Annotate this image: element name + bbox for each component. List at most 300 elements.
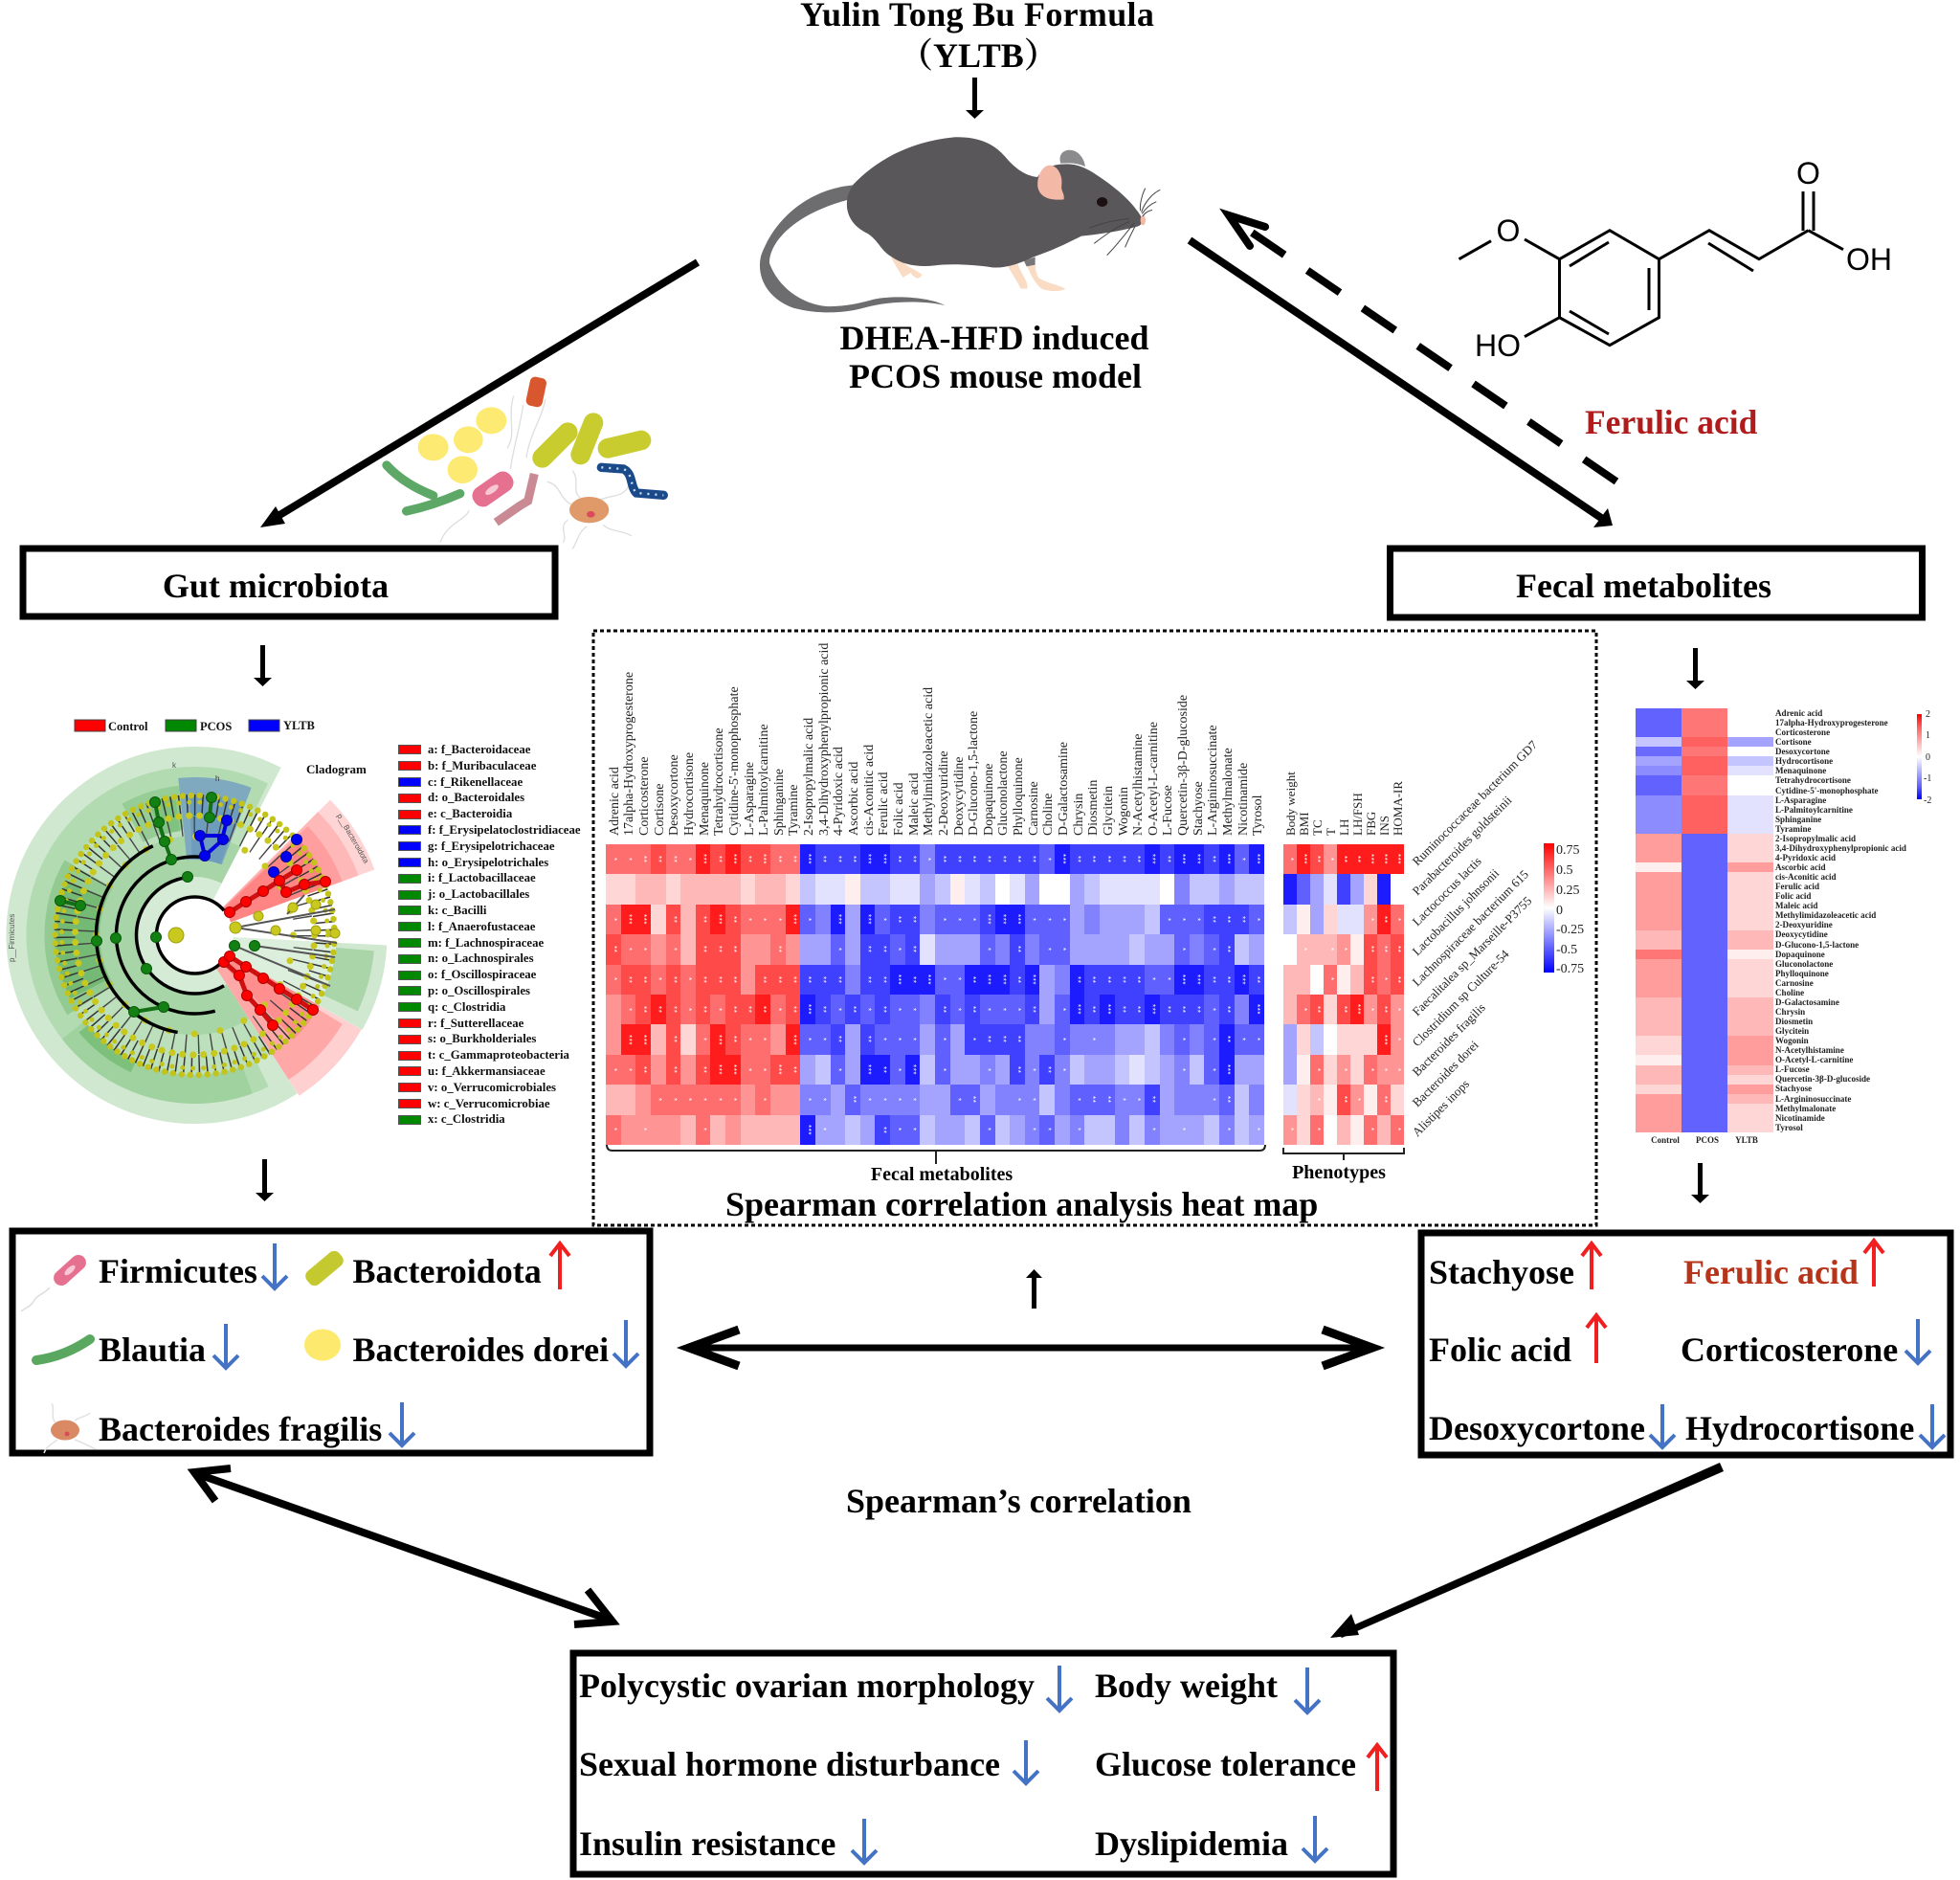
group heat map row labels: Sphinganine	[1775, 815, 1821, 824]
chart: metabolite by bacteria correlation heat map: *	[610, 858, 618, 862]
arrow: metabolites to outcomes	[1330, 1463, 1724, 1638]
chart: metabolite by bacteria correlation heat map: **	[1103, 1096, 1112, 1104]
ferulic acid label: Ferulic acid	[1585, 403, 1758, 441]
metabolite column labels: Desoxycortone	[667, 754, 681, 836]
chart: phenotype by bacteria correlation heat map: *	[1380, 977, 1389, 981]
group heat map row labels: Tyrosol	[1775, 1123, 1803, 1132]
metabolite column labels: Phylloquinone	[1012, 757, 1026, 836]
chart: metabolite by bacteria correlation heat map: *	[1208, 1008, 1216, 1012]
chart: metabolite by bacteria correlation heat map: *	[610, 1068, 618, 1071]
cladogram taxa legend: x: c_Clostridia	[428, 1112, 505, 1126]
chart: phenotype by bacteria correlation heat map: *	[1286, 858, 1295, 862]
chart: metabolite by bacteria correlation heat map: ***	[1103, 1004, 1112, 1015]
chart: metabolite by bacteria correlation heat map: *	[1253, 1038, 1261, 1041]
chart: metabolite by bacteria correlation heat map: **	[729, 946, 738, 953]
chart: metabolite by bacteria correlation heat map: *	[1043, 1128, 1052, 1131]
chart: phenotype by bacteria correlation heat map: *	[1313, 1098, 1322, 1102]
chart: metabolite by bacteria correlation heat map: *	[984, 1068, 992, 1071]
chart: metabolite by bacteria correlation heat map: **	[1103, 976, 1112, 983]
chart: metabolite by bacteria correlation heat map: **	[849, 1096, 858, 1104]
chart: metabolite by bacteria correlation heat map: *	[624, 1008, 633, 1012]
chart: phenotype by bacteria correlation heat map: **	[1340, 1096, 1348, 1104]
heat map color key for group heat map: 2	[1926, 709, 1930, 720]
chart: metabolite by bacteria correlation heat map: **	[669, 1006, 678, 1013]
chart: metabolite by bacteria correlation heat map: *	[1088, 1038, 1097, 1041]
chart: metabolite by bacteria correlation heat map: *	[714, 1098, 723, 1102]
panel: Gut microbiota heading	[23, 548, 555, 616]
bacteria row labels: Lactococcus lactis	[1410, 854, 1484, 929]
chart: metabolite by bacteria correlation heat map: *	[1133, 1098, 1142, 1102]
cladogram taxa legend: f: f_Erysipelatoclostridiaceae	[428, 823, 581, 837]
cladogram taxa legend: j: o_Lactobacillales	[428, 887, 529, 901]
chart: metabolite by bacteria correlation heat map: ***	[1029, 974, 1037, 985]
cladogram taxa legend: k: c_Bacilli	[428, 904, 486, 917]
chart: phenotype by bacteria correlation heat map: **	[1380, 946, 1389, 953]
chart: phenotype by bacteria correlation heat map: *	[1326, 977, 1335, 981]
chart: metabolite by bacteria correlation heat map: **	[1208, 916, 1216, 923]
chart: metabolite by bacteria correlation heat map: **	[819, 856, 828, 862]
chart: metabolite by bacteria correlation heat map: **	[1074, 976, 1082, 983]
chart: metabolite by bacteria correlation heat map: *	[894, 948, 902, 951]
chart: metabolite by bacteria correlation heat map: **	[1163, 1006, 1171, 1013]
chart: metabolite by bacteria correlation heat map: *	[953, 1008, 962, 1012]
cladogram branches and nodes: p__Bacteroidota	[335, 812, 370, 865]
chart: metabolite by bacteria correlation heat map: *	[1163, 977, 1171, 981]
chart: metabolite by bacteria correlation heat map: **	[1223, 1006, 1232, 1013]
chart: metabolite by bacteria correlation heat map: ***	[729, 854, 738, 864]
chart: metabolite by bacteria correlation heat map: **	[700, 1006, 708, 1013]
chart: phenotype by bacteria correlation heat map: ***	[1393, 854, 1402, 864]
cladogram taxa legend: h: o_Erysipelotrichales	[428, 856, 548, 869]
chart: metabolite by bacteria correlation heat map: *	[700, 1128, 708, 1131]
chart: metabolite by bacteria correlation heat map: *	[1043, 858, 1052, 862]
group heat map row labels: Hydrocortisone	[1775, 756, 1833, 766]
chart: metabolite by bacteria correlation heat map: ***	[1178, 854, 1187, 864]
group heat map row labels: L-Fucose	[1775, 1064, 1810, 1074]
chart: phenotype by bacteria correlation heat map: *	[1300, 1008, 1308, 1012]
chart: metabolite by bacteria correlation heat map: *	[1178, 918, 1187, 921]
chart: metabolite by bacteria correlation heat map: ***	[714, 914, 723, 925]
chart: phenotype by bacteria correlation heat map: *	[1367, 918, 1375, 921]
chart: metabolite by bacteria correlation heat map: *	[759, 918, 768, 921]
panel: fecal metabolite results: Corticosterone	[1681, 1331, 1898, 1369]
metabolite column labels: Methylmalonate	[1221, 748, 1236, 836]
chart: metabolite by bacteria correlation heat map: ***	[1074, 1004, 1082, 1015]
arrow: formula to mouse	[966, 78, 984, 119]
chart: metabolite by bacteria correlation heat map: *	[879, 1038, 887, 1041]
chart: metabolite by bacteria correlation heat map: **	[714, 856, 723, 862]
chart: phenotype by bacteria correlation heat map: *	[1286, 1128, 1295, 1131]
chart: metabolite by bacteria correlation heat map: **	[864, 976, 873, 983]
heat map color legend	[1544, 843, 1584, 976]
chart: phenotype by bacteria correlation heat map: ***	[1300, 854, 1308, 864]
bacteria row labels: Clostridium sp Culture-54	[1410, 947, 1512, 1049]
chart: metabolite by bacteria correlation heat map: *	[655, 1098, 663, 1102]
chart: metabolite by bacteria correlation heat map: **	[864, 946, 873, 953]
bacteria row labels: Lachnospiraceae bacterium 615	[1410, 867, 1531, 989]
chart: metabolite by bacteria correlation heat map: **	[1133, 856, 1142, 862]
chart: metabolite by bacteria correlation heat map	[606, 844, 1264, 1145]
chart: metabolite by bacteria correlation heat map: *	[894, 1008, 902, 1012]
chart: metabolite by bacteria correlation heat map: **	[639, 856, 648, 862]
chart: metabolite by bacteria correlation heat map: *	[879, 918, 887, 921]
chart: metabolite by bacteria correlation heat map: *	[774, 1008, 783, 1012]
chart: phenotype by bacteria correlation heat map: *	[1326, 948, 1335, 951]
chart: phenotype by bacteria correlation heat map: **	[1313, 1006, 1322, 1013]
chart: metabolite by bacteria correlation heat map: **	[894, 916, 902, 923]
metabolite column labels: Carnosine	[1027, 781, 1041, 836]
chart: metabolite by bacteria correlation heat map: ***	[1193, 854, 1202, 864]
chart: metabolite by bacteria correlation heat map: **	[745, 1006, 753, 1013]
panel: fecal metabolite results: Ferulic acid	[1683, 1253, 1859, 1291]
group heat map row labels: Quercetin-3β-D-glucoside	[1775, 1074, 1870, 1084]
group heat map row labels: 17alpha-Hydroxyprogesterone	[1775, 718, 1888, 727]
chart: metabolite by bacteria correlation heat map: **	[939, 856, 947, 862]
chart: metabolite by bacteria correlation heat map: *	[655, 977, 663, 981]
metabolite column labels: Diosmetin	[1086, 780, 1101, 836]
chart: metabolite by bacteria correlation heat map: **	[819, 976, 828, 983]
group heat map row labels: Choline	[1775, 988, 1804, 997]
chart: metabolite by bacteria correlation heat map: ***	[639, 1035, 648, 1045]
chart: metabolite by bacteria correlation heat map: **	[774, 856, 783, 862]
chart: metabolite by bacteria correlation heat map: ***	[984, 974, 992, 985]
cladogram taxa legend: v: o_Verrucomicrobiales	[428, 1081, 556, 1094]
metabolite column labels: N-Acetylhistamine	[1131, 733, 1146, 836]
chart: metabolite by bacteria correlation heat map: *	[610, 977, 618, 981]
metabolite column labels: O-Acetyl-L-carnitine	[1147, 722, 1161, 836]
chart: metabolite by bacteria correlation heat map: **	[1013, 976, 1022, 983]
chart: metabolite by bacteria correlation heat map: **	[1208, 856, 1216, 862]
chart: metabolite by bacteria correlation heat map: **	[1088, 976, 1097, 983]
chart: metabolite by bacteria correlation heat map: **	[909, 916, 918, 923]
chart: metabolite by bacteria correlation heat map: **	[789, 976, 797, 983]
panel: fecal metabolite results: Hydrocortisone	[1685, 1409, 1914, 1447]
chart: metabolite by bacteria correlation heat map: **	[610, 946, 618, 953]
metabolite column labels: Ascorbic acid	[847, 762, 861, 836]
heat map color key for group heat map: -2	[1924, 795, 1931, 806]
cladogram taxa legend: o: f_Oscillospiraceae	[428, 968, 536, 981]
chart: metabolite by bacteria correlation heat map: ***	[624, 914, 633, 925]
cladogram branches and nodes: p__Firmicutes	[8, 914, 16, 962]
arrow: double headed microbes and metabolites	[689, 1330, 1372, 1366]
chart: metabolite by bacteria correlation heat map: **	[639, 1066, 648, 1073]
metabolite column labels: Adrenic acid	[608, 767, 622, 836]
group heat map row labels: Carnosine	[1775, 978, 1814, 988]
chart: phenotype by bacteria correlation heat map: *	[1367, 1068, 1375, 1071]
arrow: microbiota to outcomes double headed	[194, 1468, 612, 1624]
cladogram branches and nodes: k	[172, 761, 177, 770]
chart: metabolite by bacteria correlation heat map: *	[984, 1008, 992, 1012]
chart: metabolite by bacteria correlation heat map: ***	[864, 914, 873, 925]
bacteria row labels: Faecalitalea sp_Marseille-P3755	[1410, 893, 1534, 1018]
group heat map column labels	[1651, 1135, 1758, 1145]
chart: metabolite by bacteria correlation heat map: **	[864, 1036, 873, 1043]
chart: metabolite by bacteria correlation heat map: *	[1208, 948, 1216, 951]
chart: metabolite by bacteria correlation heat map: **	[1223, 1036, 1232, 1043]
chart: metabolite by bacteria correlation heat map: ***	[1058, 854, 1067, 864]
bacteria row labels: Bacteroides dorei	[1410, 1038, 1481, 1109]
mouse model caption	[839, 319, 1149, 395]
panel: fecal metabolite results	[1421, 1233, 1950, 1455]
chart: phenotype by bacteria correlation heat map: *	[1367, 1128, 1375, 1131]
metabolite column labels: Folic acid	[892, 782, 906, 836]
cladogram taxa legend: u: f_Akkermansiaceae	[428, 1064, 546, 1078]
phenotype column labels: T	[1324, 828, 1338, 836]
arrow: cladogram to result box	[256, 1159, 274, 1201]
chart: metabolite by bacteria correlation heat map: *	[700, 1038, 708, 1041]
cladogram legend: Cladogram	[306, 762, 367, 776]
group heat map row labels: Cytidine-5'-monophosphate	[1775, 785, 1879, 795]
chart: metabolite by bacteria correlation heat map: **	[729, 1006, 738, 1013]
metabolite column labels: Deoxycytidine	[952, 757, 967, 836]
metabolite column labels: Ferulic acid	[877, 772, 891, 836]
arrow: gut box to cladogram	[254, 645, 272, 686]
metabolite column labels: Dopaquinone	[982, 764, 996, 836]
chart: metabolite by bacteria correlation heat map: *	[1029, 1068, 1037, 1071]
chart: phenotype by bacteria correlation heat map: *	[1353, 1098, 1362, 1102]
chart: metabolite by bacteria correlation heat map: **	[1088, 856, 1097, 862]
chart: metabolite by bacteria correlation heat map: *	[745, 1038, 753, 1041]
chart: phenotype by bacteria correlation heat map: *	[1326, 858, 1335, 862]
group heat map row labels: Methylmalonate	[1775, 1104, 1836, 1113]
chart: metabolite by bacteria correlation heat map: **	[984, 856, 992, 862]
group heat map row labels: Ascorbic acid	[1775, 862, 1826, 872]
chart: metabolite by bacteria correlation heat map: ***	[924, 974, 932, 985]
chart: metabolite by bacteria correlation heat map: *	[745, 918, 753, 921]
chart: metabolite by bacteria correlation heat map: *	[1043, 948, 1052, 951]
panel: phenotype outcomes: Sexual hormone disturbance	[579, 1745, 1000, 1783]
group heat map row labels: Corticosterone	[1775, 727, 1830, 737]
chart: phenotype by bacteria correlation heat map: **	[1380, 1006, 1389, 1013]
chart: metabolite by bacteria correlation heat map: ***	[714, 1035, 723, 1045]
group heat map row labels: 3,4-Dihydroxyphenylpropionic acid	[1775, 843, 1906, 853]
chart: metabolite by bacteria correlation heat map: *	[729, 1098, 738, 1102]
icon: Firmicutes	[21, 1252, 89, 1311]
chart: metabolite by bacteria correlation heat map: *	[1029, 1128, 1037, 1131]
group heat map row labels: L-Palmitoylcarnitine	[1775, 805, 1853, 815]
chart: phenotype by bacteria correlation heat map: **	[1393, 976, 1402, 983]
cladogram legend	[75, 719, 367, 776]
chart: metabolite by bacteria correlation heat map: *	[1208, 1068, 1216, 1071]
chart: metabolite by bacteria correlation heat map: **	[1029, 856, 1037, 862]
chart: phenotype by bacteria correlation heat map: *	[1313, 1128, 1322, 1131]
metabolite column labels: Hydrocortisone	[682, 752, 697, 836]
chart: metabolite by bacteria correlation heat map: *	[774, 918, 783, 921]
chart: phenotype by bacteria correlation heat map: ***	[1380, 1035, 1389, 1045]
metabolite column labels: 17alpha-Hydroxyprogesterone	[622, 672, 636, 836]
chart: metabolite by bacteria correlation heat map: ***	[1148, 1004, 1157, 1015]
heat map color legend: 0.5	[1556, 863, 1573, 878]
chart: metabolite by bacteria correlation heat map: ***	[834, 914, 842, 925]
cladogram branches and nodes	[8, 761, 370, 1030]
arrow: solid mouse to fecal metabolites	[1190, 240, 1613, 527]
chart: metabolite by bacteria correlation heat map: *	[1058, 948, 1067, 951]
chart: phenotype by bacteria correlation heat map	[1283, 844, 1404, 1145]
chart: metabolite by bacteria correlation heat map: **	[804, 976, 813, 983]
chart: metabolite by bacteria correlation heat map: **	[700, 946, 708, 953]
chart: metabolite by bacteria correlation heat map: *	[624, 948, 633, 951]
chart: metabolite by bacteria correlation heat map: *	[924, 858, 932, 862]
chart: metabolite by bacteria correlation heat map: ***	[804, 1004, 813, 1015]
chart: metabolite by bacteria correlation heat map: **	[759, 976, 768, 983]
chart: metabolite by bacteria correlation heat map: **	[879, 976, 887, 983]
bacteria row labels: Alistipes inops	[1410, 1077, 1472, 1139]
chart: metabolite by bacteria correlation heat map: **	[1133, 976, 1142, 983]
chart: metabolite by bacteria correlation heat map: *	[1013, 1008, 1022, 1012]
chart: metabolite by bacteria correlation heat map: *	[700, 1098, 708, 1102]
chart: metabolite by bacteria correlation heat map: *	[864, 1008, 873, 1012]
group heat map row labels: Nicotinamide	[1775, 1113, 1825, 1123]
panel: gut microbiota results: Bacteroides dorei	[352, 1331, 609, 1369]
chart: metabolite by bacteria correlation heat map: **	[1103, 856, 1112, 862]
chart: metabolite by bacteria correlation heat map: **	[639, 1006, 648, 1013]
phenotype column labels: INS	[1377, 816, 1392, 836]
panel: Fecal metabolites heading: Fecal metabolites	[1516, 567, 1771, 605]
arrow: dashed ferulic acid to mouse	[1229, 215, 1616, 481]
chart: metabolite by bacteria correlation heat map: ***	[998, 914, 1007, 925]
chart: metabolite by bacteria correlation heat map: **	[879, 946, 887, 953]
chart: metabolite by bacteria correlation heat map: **	[1088, 1006, 1097, 1013]
chart: metabolite by bacteria correlation heat map: *	[759, 1098, 768, 1102]
cladogram taxa legend: s: o_Burkholderiales	[428, 1032, 536, 1045]
icon: Blautia	[36, 1339, 90, 1360]
chart: metabolite by bacteria correlation heat map: **	[849, 1006, 858, 1013]
cladogram taxa legend: n: o_Lachnospirales	[428, 951, 534, 965]
group heat map row labels: Adrenic acid	[1775, 708, 1822, 718]
chart: metabolite by bacteria correlation heat map: *	[1178, 1128, 1187, 1131]
chart: metabolite by bacteria correlation heat map: **	[1223, 1096, 1232, 1104]
group heat map row labels: Ferulic acid	[1775, 882, 1819, 891]
chart: metabolite by bacteria correlation heat map: **	[774, 976, 783, 983]
phenotype column labels: BMI	[1297, 812, 1311, 836]
chart: metabolite by bacteria correlation heat map: **	[819, 1006, 828, 1013]
chart: metabolite by bacteria correlation heat map: ***	[1193, 974, 1202, 985]
chart: metabolite by bacteria correlation heat map: **	[714, 946, 723, 953]
chart: metabolite by bacteria correlation heat map: **	[1178, 1006, 1187, 1013]
metabolite column labels: Tetrahydrocortisone	[712, 727, 726, 836]
cladogram taxa legend: b: f_Muribaculaceae	[428, 759, 536, 772]
chart: metabolite by bacteria correlation heat map: *	[969, 918, 977, 921]
metabolite column labels: D-Galactosamine	[1057, 742, 1071, 836]
cladogram legend: PCOS	[200, 720, 232, 733]
chart: metabolite by bacteria correlation heat map: ***	[1178, 974, 1187, 985]
panel: phenotype outcomes	[573, 1653, 1393, 1874]
group heat map column labels: YLTB	[1735, 1135, 1758, 1145]
metabolite column labels: Tyramine	[787, 785, 801, 836]
chart: metabolite by bacteria correlation heat map: *	[1253, 1128, 1261, 1131]
chart: metabolite by bacteria correlation heat map: ***	[998, 974, 1007, 985]
chart: metabolite by bacteria correlation heat map: ***	[894, 974, 902, 985]
chart: metabolite by bacteria correlation heat map: ***	[1253, 1004, 1261, 1015]
chart: metabolite by bacteria correlation heat map: **	[639, 976, 648, 983]
arrow: mouse to gut microbiota	[260, 262, 698, 527]
bacteria row labels	[1410, 737, 1541, 1139]
chart: metabolite by bacteria correlation heat map: **	[789, 1006, 797, 1013]
chart: metabolite by bacteria correlation heat map: *	[894, 1098, 902, 1102]
chart: phenotype by bacteria correlation heat map: ***	[1380, 854, 1389, 864]
chart: metabolite by bacteria correlation heat map: *	[624, 858, 633, 862]
phenotype column labels: HOMA-IR	[1391, 781, 1405, 836]
chart: phenotype by bacteria correlation heat map: *	[1393, 918, 1402, 921]
chart: phenotype by bacteria correlation heat map: ***	[1367, 854, 1375, 864]
panel: Gut microbiota heading: Gut microbiota	[163, 567, 389, 605]
group heat map row labels: Cortisone	[1775, 737, 1812, 747]
chart: metabolite by bacteria correlation heat map: *	[1029, 1098, 1037, 1102]
chart: metabolite by bacteria correlation heat map: **	[849, 856, 858, 862]
chart: metabolite by bacteria correlation heat map: *	[909, 1038, 918, 1041]
cladogram taxa legend: w: c_Verrucomicrobiae	[428, 1097, 550, 1110]
group heat map row labels: Desoxycortone	[1775, 747, 1830, 756]
cladogram taxa legend: a: f_Bacteroidaceae	[428, 743, 530, 756]
chart: metabolite by bacteria correlation heat map: **	[700, 1066, 708, 1073]
arrow: heat map to result box	[1691, 1163, 1709, 1203]
icon: ferulic acid structure: O	[1497, 213, 1520, 248]
chart: metabolite by bacteria correlation heat map: **	[909, 976, 918, 983]
chart: metabolite by bacteria correlation heat map: **	[984, 1036, 992, 1043]
group heat map row labels: Tyramine	[1775, 824, 1812, 834]
group heat map row labels: Phylloquinone	[1775, 969, 1829, 978]
metabolite column labels	[608, 643, 1265, 836]
chart: metabolite by bacteria correlation heat map: **	[624, 976, 633, 983]
chart: metabolite by bacteria correlation heat map: ***	[700, 854, 708, 864]
cladogram taxa legend: i: f_Lactobacillaceae	[428, 871, 536, 884]
chart: phenotype by bacteria correlation heat map: *	[1313, 1068, 1322, 1071]
group heat map row labels: Chrysin	[1775, 1007, 1805, 1017]
chart: metabolite by bacteria correlation heat map: *	[984, 1128, 992, 1131]
icon: mouse	[760, 137, 1160, 312]
cladogram taxa legend: p: o_Oscillospirales	[428, 984, 530, 997]
cladogram taxa legend: l: f_Anaerofustaceae	[428, 920, 535, 933]
metabolite column labels: Nicotinamide	[1236, 763, 1251, 836]
chart: metabolite by bacteria correlation heat map: ***	[804, 1125, 813, 1135]
chart: metabolite by bacteria correlation heat map: ***	[729, 1064, 738, 1075]
chart: metabolite by bacteria correlation heat map: *	[909, 1008, 918, 1012]
cladogram taxa legend	[398, 743, 581, 1126]
chart: metabolite by bacteria correlation heat map: *	[1148, 977, 1157, 981]
chart: metabolite by bacteria correlation heat map: ***	[864, 854, 873, 864]
chart: metabolite by bacteria correlation heat map: **	[909, 856, 918, 862]
metabolite column labels: 2-Isopropylmalic acid	[802, 718, 816, 836]
chart: metabolite by bacteria correlation heat map: *	[1238, 858, 1247, 862]
chart: metabolite by bacteria correlation heat map: **	[1223, 916, 1232, 923]
cladogram taxa legend: d: o_Bacteroidales	[428, 791, 524, 804]
icon: gut bacteria cluster	[387, 376, 663, 548]
title: （YLTB）	[899, 36, 1058, 75]
cladogram legend: Control	[108, 720, 148, 733]
cladogram branches and nodes: h	[215, 774, 219, 783]
chart: metabolite by bacteria correlation heat map: **	[1013, 856, 1022, 862]
chart: metabolite by bacteria correlation heat map: ***	[864, 1064, 873, 1075]
metabolite column labels: cis-Aconitic acid	[862, 745, 877, 836]
metabolite column labels: Wogonin	[1117, 787, 1131, 836]
chart: metabolite by bacteria correlation heat map: **	[879, 1066, 887, 1073]
chart: metabolite by bacteria correlation heat map: **	[1013, 946, 1022, 953]
group heat map row labels: Tetrahydrocortisone	[1775, 775, 1851, 785]
chart: metabolite by bacteria correlation heat map: **	[1029, 1006, 1037, 1013]
chart: metabolite by bacteria correlation heat map: *	[1058, 1008, 1067, 1012]
chart: metabolite by bacteria correlation heat map: *	[894, 1128, 902, 1131]
chart: metabolite by bacteria correlation heat map: *	[1163, 918, 1171, 921]
chart: metabolite by bacteria correlation heat map: **	[1223, 976, 1232, 983]
chart: metabolite by bacteria correlation heat map: ***	[1253, 854, 1261, 864]
chart: metabolite by bacteria correlation heat map: ***	[789, 1035, 797, 1045]
chart: metabolite by bacteria correlation heat map: *	[669, 1098, 678, 1102]
chart: phenotype by bacteria correlation heat map: *	[1340, 1068, 1348, 1071]
chart: metabolite by bacteria correlation heat map: *	[1058, 1068, 1067, 1071]
group heat map row labels: Deoxycytidine	[1775, 929, 1828, 939]
chart: phenotype by bacteria correlation heat map: *	[1340, 948, 1348, 951]
cladogram taxa legend: r: f_Sutterellaceae	[428, 1017, 523, 1030]
